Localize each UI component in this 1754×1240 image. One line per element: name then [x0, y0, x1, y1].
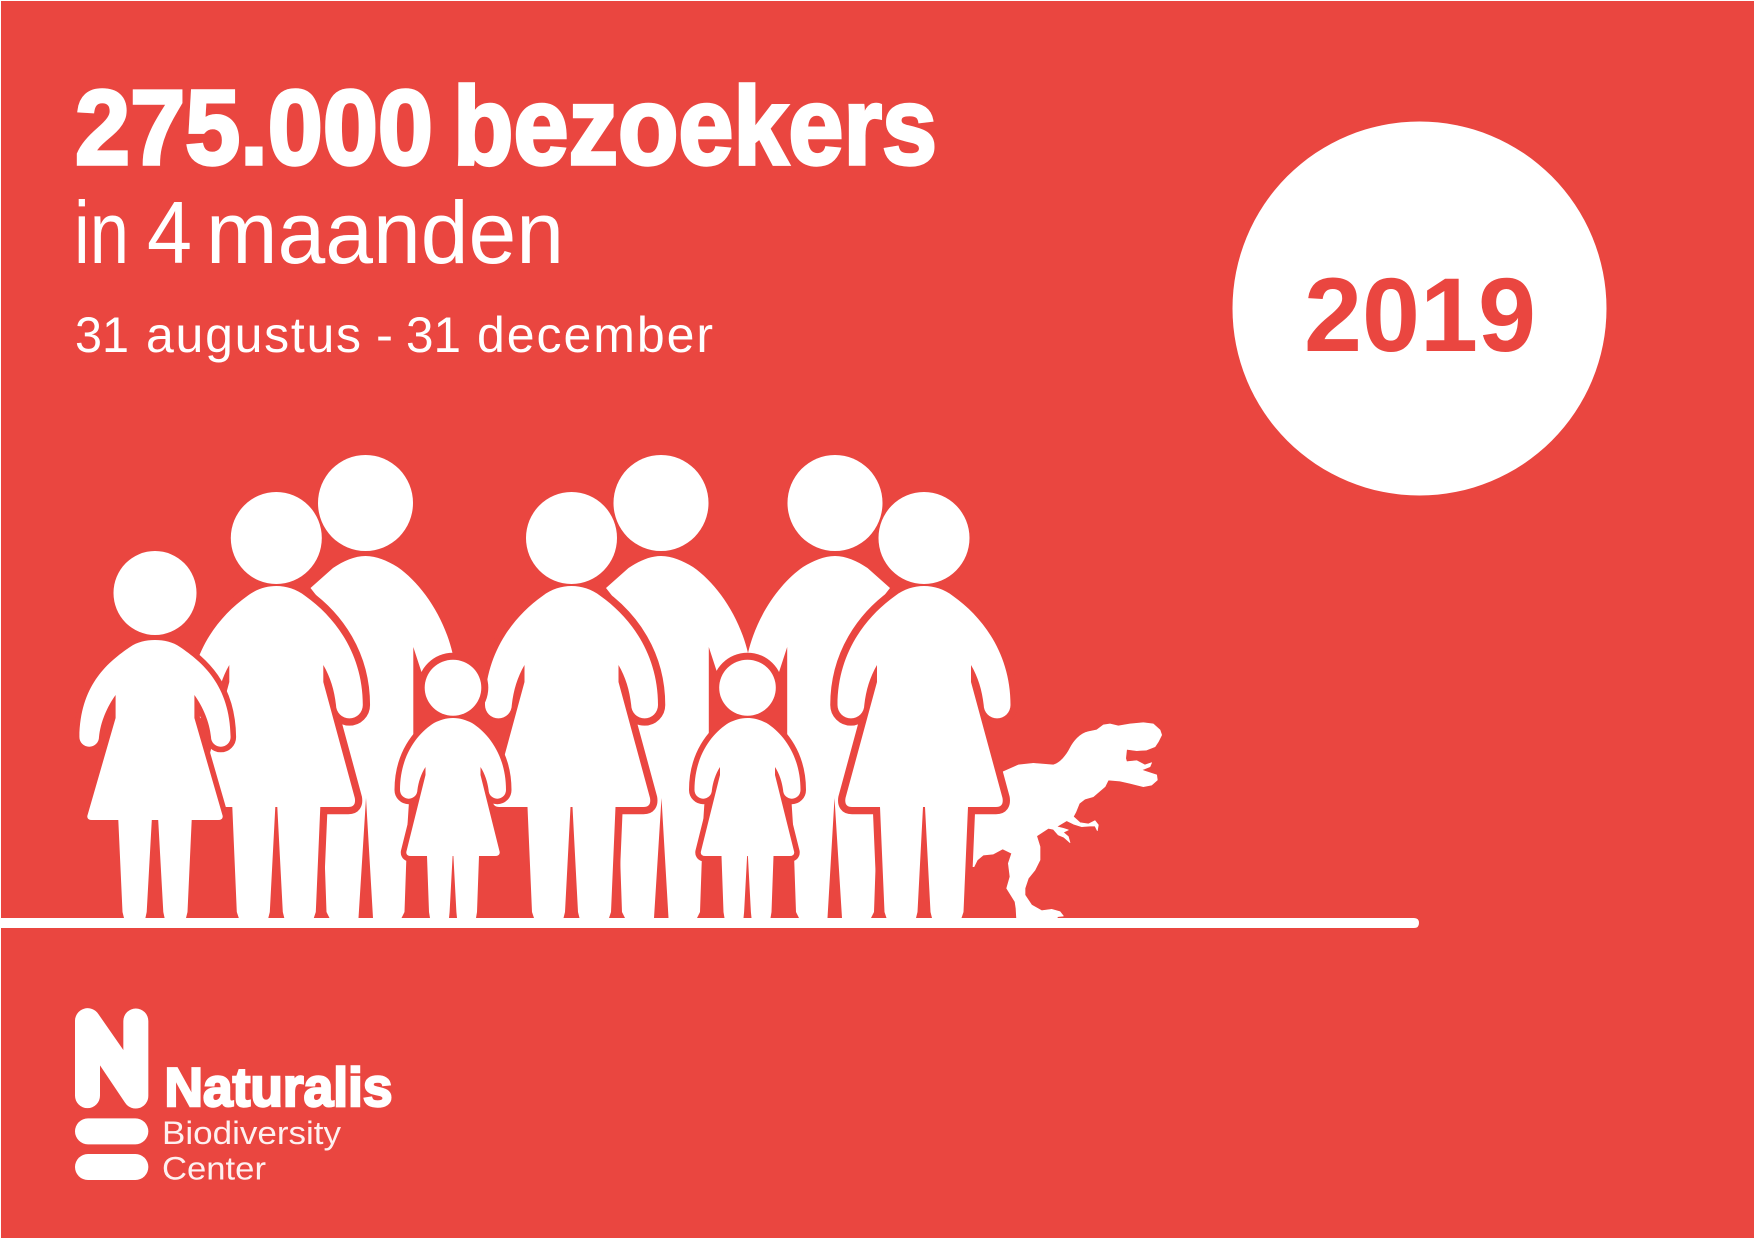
- year badge: 2019: [1304, 257, 1536, 374]
- date range: 31: [406, 307, 461, 363]
- icon: T. rex silhouette: [967, 723, 1162, 920]
- logo: Naturalis Biodiversity Center: [75, 1008, 393, 1186]
- ground line: [0, 918, 1419, 928]
- title: visitors: 275.000: [75, 69, 433, 187]
- title: visitors: [75, 65, 937, 188]
- woman: second from left: [190, 492, 363, 918]
- date range: [75, 307, 713, 363]
- child: right: [694, 653, 800, 918]
- logo line: Biodiversity: Biodiversity: [162, 1115, 342, 1151]
- woman: right: [838, 492, 1010, 918]
- subtitle: period length: maanden: [206, 183, 564, 282]
- woman: far left: [79, 551, 231, 918]
- year badge: [1232, 122, 1606, 496]
- logo wordmark: Naturalis: [164, 1056, 392, 1118]
- date range: 31: [75, 307, 129, 363]
- man: back left: [310, 455, 458, 918]
- title: visitors: bezoekers: [453, 65, 937, 188]
- date range: december: [477, 307, 713, 363]
- illustration: family group with T. rex: [0, 455, 1419, 928]
- subtitle: period length: 4: [147, 183, 192, 282]
- subtitle: period length: in: [74, 183, 129, 282]
- logo line: Center: Center: [162, 1150, 266, 1186]
- logo mark: [75, 1008, 148, 1180]
- man: back right: [743, 455, 890, 918]
- woman: centre: [485, 492, 658, 918]
- child: left: [400, 653, 506, 918]
- date range: augustus: [146, 307, 361, 363]
- man: back centre: [606, 455, 753, 918]
- date range: -: [376, 307, 393, 363]
